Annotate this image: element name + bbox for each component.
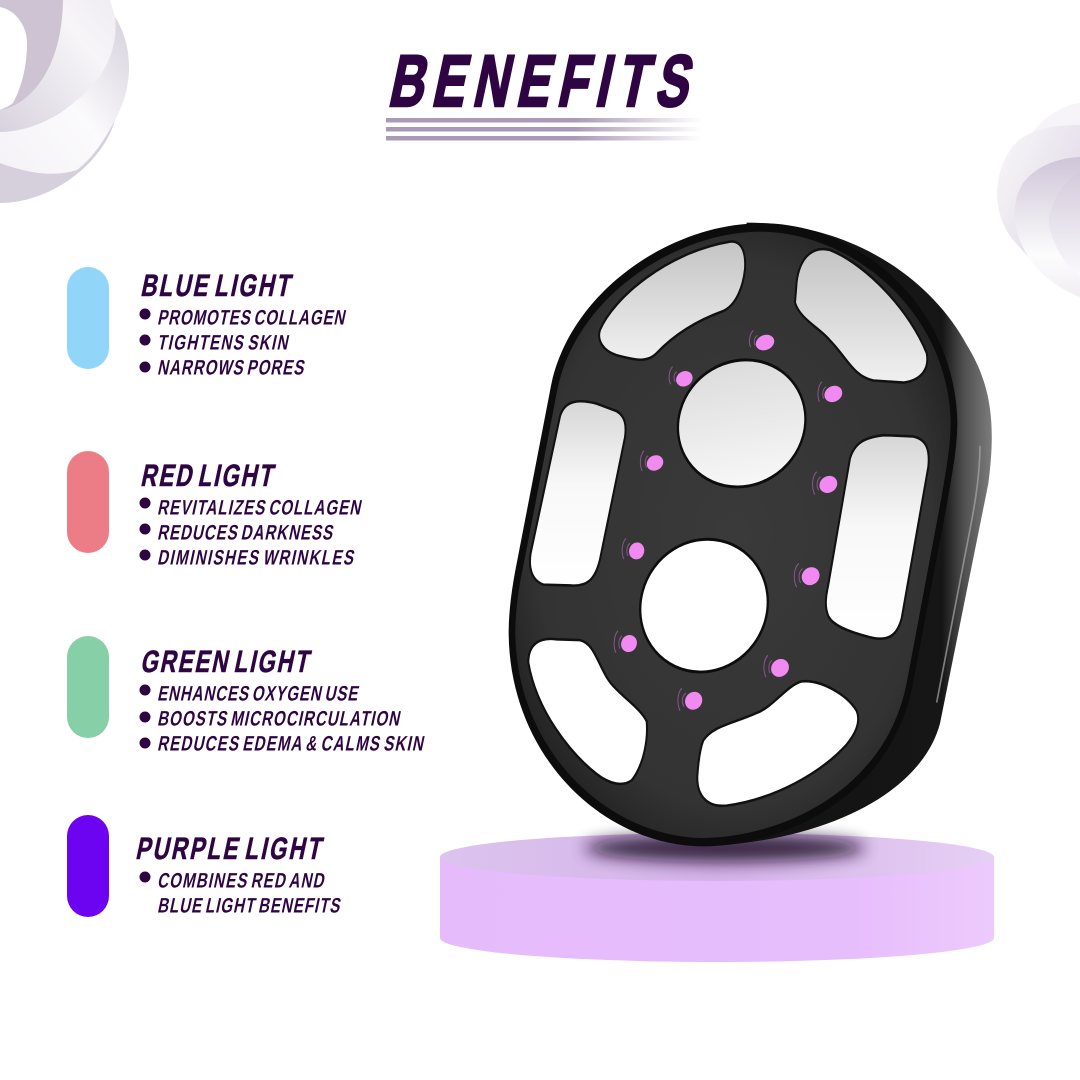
purple light benefits list: COMBINES RED AND	[156, 868, 327, 892]
red light benefits list: REVITALIZES COLLAGEN	[156, 495, 364, 519]
green light benefits list: ENHANCES OXYGEN USE	[156, 681, 361, 705]
top round electrode	[671, 350, 812, 497]
blue light benefits list: TIGHTENS SKIN	[156, 330, 291, 354]
green light heading: GREEN LIGHT	[139, 644, 314, 679]
red light benefits list	[140, 495, 364, 569]
title underline stripes	[386, 118, 702, 140]
purple pill	[67, 815, 109, 917]
blue light heading: BLUE LIGHT	[139, 268, 295, 303]
decoration: right-side swirl	[997, 103, 1080, 297]
podium	[440, 833, 994, 962]
panel: red light	[67, 451, 364, 569]
title: BENEFITS	[384, 41, 700, 122]
panel: blue light	[67, 267, 348, 379]
left sensor pad	[530, 401, 626, 586]
blue light benefits list: PROMOTES COLLAGEN	[156, 305, 348, 329]
bottom right sensor pad	[697, 681, 858, 806]
device side edge	[717, 223, 992, 846]
red pill	[67, 451, 109, 553]
green light benefits list: REDUCES EDEMA & CALMS SKIN	[156, 731, 427, 755]
bottom left sensor pad	[528, 639, 647, 784]
panel: green light	[67, 636, 427, 755]
panel: purple light	[67, 815, 343, 917]
green light benefits list: BOOSTS MICROCIRCULATION	[156, 706, 403, 730]
top right sensor pad	[795, 249, 927, 383]
green light benefits list	[140, 681, 427, 755]
bottom round electrode	[633, 529, 775, 682]
product: LED device	[509, 223, 992, 846]
blue light benefits list	[140, 305, 348, 379]
blue light benefits list: NARROWS PORES	[156, 355, 307, 379]
purple light benefits list: BLUE LIGHT BENEFITS	[156, 893, 343, 917]
top left sensor pad	[599, 241, 745, 360]
decoration: top-left swirl	[0, 0, 129, 203]
pink LED lights	[614, 330, 843, 712]
green pill	[67, 636, 109, 738]
purple light benefits list	[140, 868, 343, 917]
blue pill	[67, 267, 109, 369]
red light heading: RED LIGHT	[139, 458, 278, 493]
purple light heading: PURPLE LIGHT	[134, 831, 326, 866]
device front face	[509, 223, 957, 846]
right sensor pad	[826, 435, 929, 639]
red light benefits list: DIMINISHES WRINKLES	[156, 545, 357, 569]
red light benefits list: REDUCES DARKNESS	[156, 520, 336, 544]
